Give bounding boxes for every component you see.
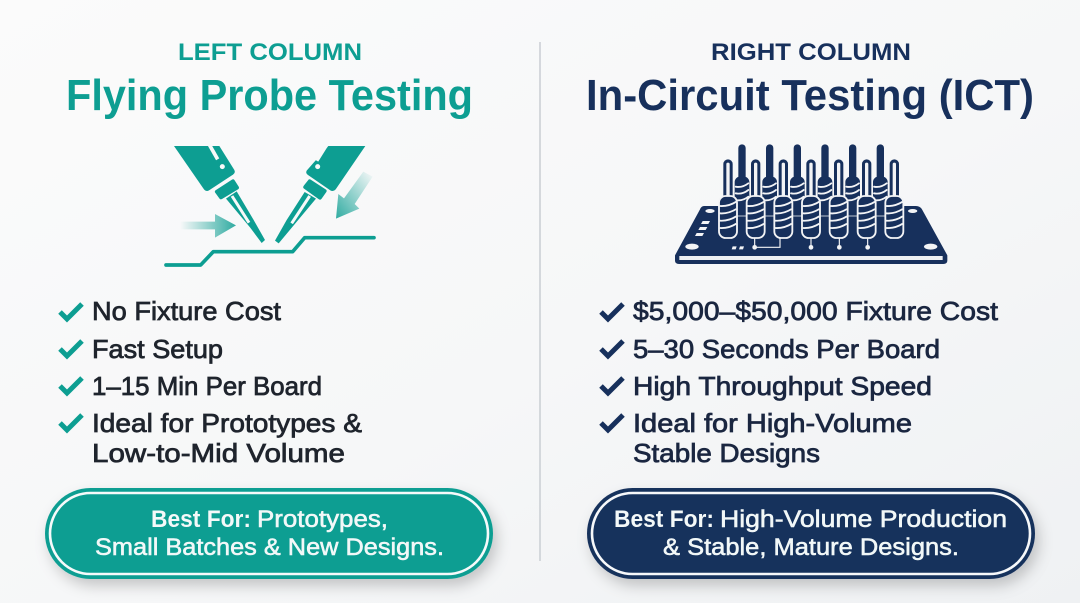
right benefit list: High Throughput Speed bbox=[633, 371, 932, 401]
right callout pill: High-Volume Production bbox=[720, 506, 1007, 533]
front row pins bbox=[723, 159, 899, 203]
left benefit list: Low-to-Mid Volume bbox=[92, 438, 345, 468]
left eyebrow heading: LEFT COLUMN bbox=[178, 39, 362, 66]
right benefit list: Stable Designs bbox=[633, 438, 820, 468]
right callout pill bbox=[587, 488, 1035, 579]
left benefit list: 1–15 Min Per Board bbox=[92, 371, 322, 401]
right eyebrow heading: RIGHT COLUMN bbox=[711, 39, 911, 66]
left callout pill: Small Batches & New Designs. bbox=[95, 534, 444, 561]
right callout pill: & Stable, Mature Designs. bbox=[663, 534, 959, 561]
right benefit list: Ideal for High-Volume bbox=[633, 408, 912, 438]
left callout pill: Prototypes, bbox=[257, 506, 388, 533]
right benefit list: 5–30 Seconds Per Board bbox=[633, 334, 940, 364]
right benefit list: $5,000–$50,000 Fixture Cost bbox=[633, 296, 999, 326]
left benefit list: No Fixture Cost bbox=[92, 296, 282, 326]
icon: flying probes over circuit trace bbox=[166, 145, 374, 265]
right title: In-Circuit Testing (ICT) bbox=[586, 71, 1034, 120]
left title: Flying Probe Testing bbox=[66, 71, 473, 120]
left benefit list: Ideal for Prototypes & bbox=[92, 408, 362, 438]
panel: left column bbox=[45, 39, 493, 579]
left callout pill: Best For: bbox=[151, 506, 251, 533]
icon: ICT bed-of-nails fixture on PCB bbox=[675, 144, 947, 264]
left benefit list bbox=[60, 296, 362, 468]
panel: right column bbox=[586, 39, 1035, 579]
left callout pill bbox=[45, 488, 493, 579]
left benefit list: Fast Setup bbox=[92, 334, 223, 364]
right benefit list bbox=[601, 296, 999, 468]
right callout pill: Best For: bbox=[614, 506, 714, 533]
back row pins bbox=[735, 144, 888, 207]
